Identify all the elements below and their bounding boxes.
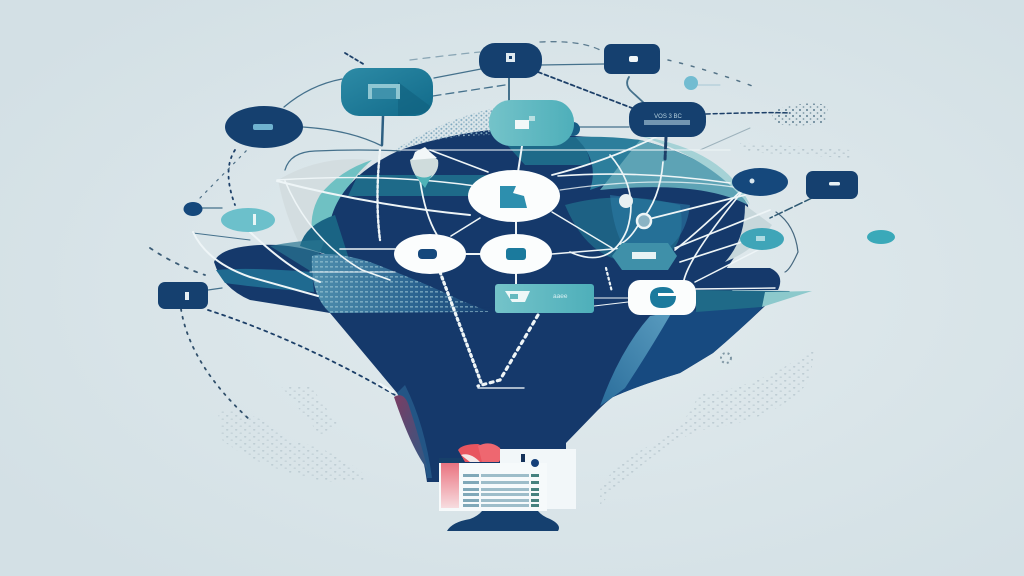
left neck shade (397, 385, 432, 478)
node: white right (480, 234, 552, 274)
node: dark ellipse upper left (225, 106, 303, 148)
node: teal right (740, 228, 784, 250)
node: small dark dot (184, 202, 202, 216)
node: light teal left (221, 208, 275, 232)
node: dark text label: VOS 3 BC (654, 114, 682, 120)
node: light blue dot (684, 76, 698, 90)
grey wedge left of globe (278, 159, 370, 245)
dark dashed connectors (150, 42, 755, 420)
left rim lobe (300, 215, 350, 262)
grey-blue thin connectors (193, 52, 812, 290)
node: white circle with icon (468, 170, 560, 222)
node: dark top right box (604, 44, 660, 74)
cone sheen (600, 312, 672, 406)
cone right shade (613, 307, 763, 397)
dotted halftone clouds (218, 104, 850, 505)
node: teal label: aaee (553, 293, 568, 300)
sheet front (439, 463, 547, 511)
right rim lobe (696, 268, 780, 290)
node: white left (394, 234, 466, 274)
node: teal label (495, 284, 594, 313)
teal bands (348, 175, 500, 196)
red hearts (458, 444, 485, 462)
white connectors (193, 135, 775, 392)
globe (330, 130, 748, 310)
dark pens (521, 454, 525, 462)
node: dark right ellipse (732, 168, 788, 196)
node: light teal centre (489, 100, 574, 146)
node: white rounded square (628, 280, 696, 315)
document tray at funnel base (439, 443, 576, 531)
connector lines (150, 42, 812, 420)
plum accent (394, 395, 428, 470)
node: teal rounded box (341, 68, 433, 116)
node: dark left box (158, 282, 208, 309)
crescent (312, 160, 372, 240)
pink sidebar (441, 463, 459, 508)
node: dark right box (806, 171, 858, 199)
sheet back (500, 449, 576, 509)
node: teal far right dot (867, 230, 895, 244)
node: teal tag (612, 243, 677, 270)
node: dark text label (629, 102, 706, 137)
node: dark top centre (479, 43, 542, 78)
tray stand (447, 511, 559, 531)
connector joints (410, 122, 651, 228)
dark tab (439, 458, 463, 463)
funnel body (214, 130, 812, 482)
table rows (463, 474, 539, 507)
grey wedge right (725, 205, 772, 262)
halftone patch (312, 254, 490, 313)
halftone dots near top (392, 108, 495, 152)
funnel cone (330, 270, 765, 482)
